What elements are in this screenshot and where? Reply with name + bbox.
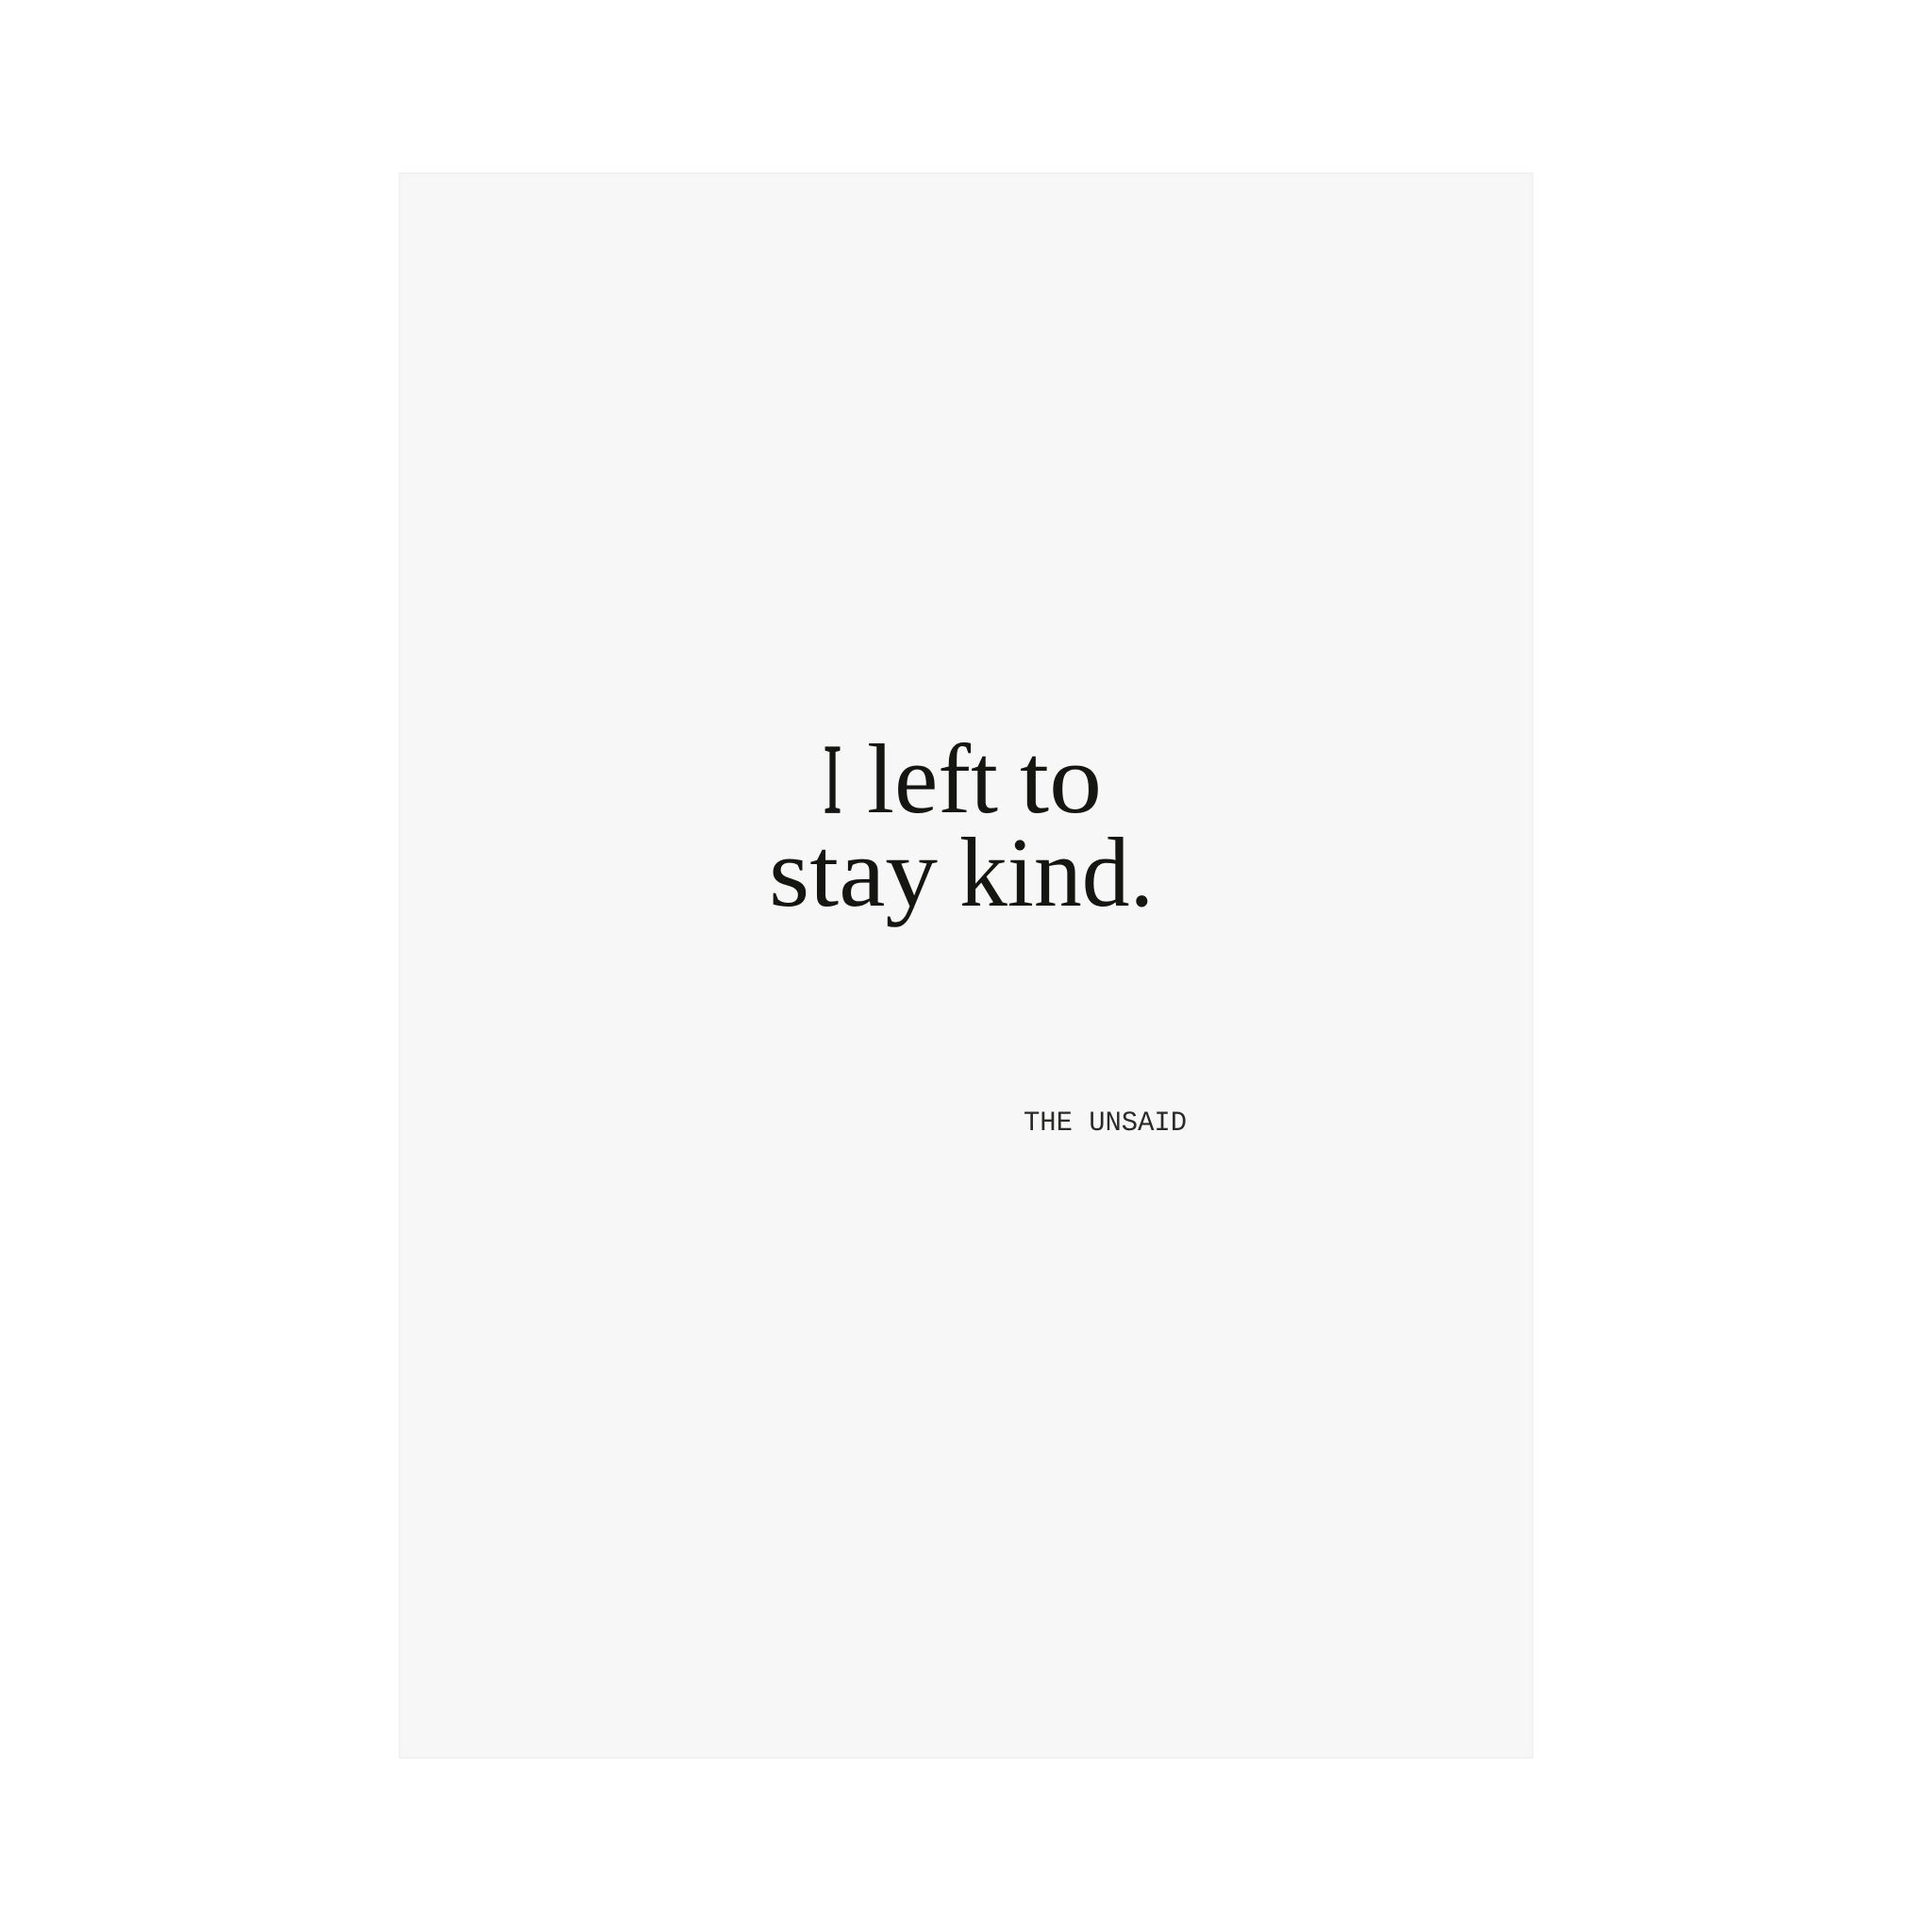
title line 1: left bbox=[867, 724, 998, 834]
title line 1: to bbox=[1020, 724, 1102, 834]
panel: poster card bbox=[400, 174, 1532, 1758]
title line 2 bbox=[769, 817, 1154, 927]
title line 1: I bbox=[824, 724, 841, 834]
title line 1 bbox=[824, 724, 1102, 834]
brand label: THE UNSAID bbox=[1024, 1108, 1187, 1140]
title line 2: kind. bbox=[959, 817, 1154, 927]
title line 2: stay bbox=[769, 817, 939, 927]
title bbox=[769, 724, 1154, 927]
